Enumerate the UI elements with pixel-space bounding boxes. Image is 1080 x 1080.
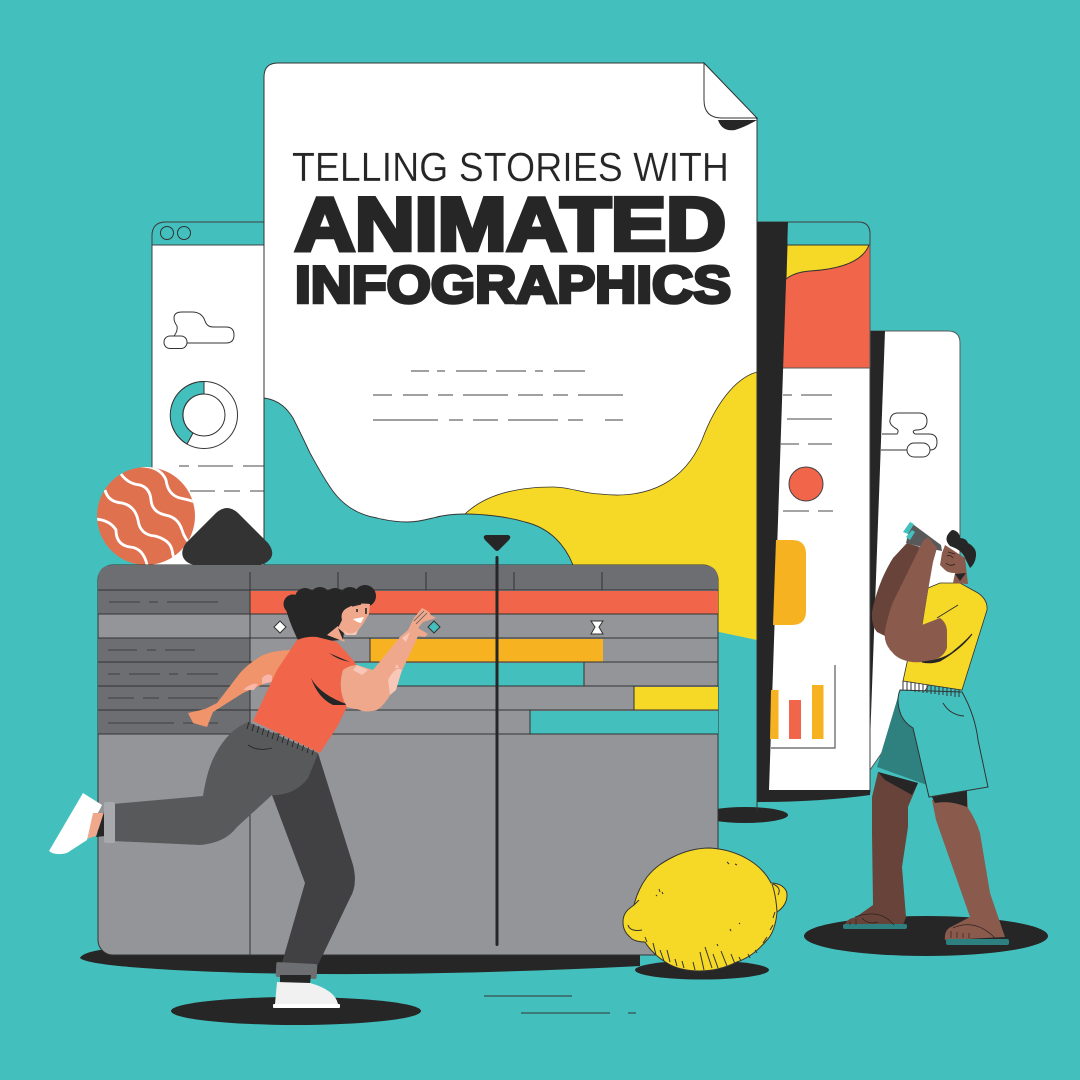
keyframe markers (274, 621, 603, 634)
panel: animation timeline (98, 565, 718, 955)
shirt (253, 637, 358, 753)
icon: orange patterned ball (97, 467, 195, 564)
front leg (932, 793, 1005, 940)
title: INFOGRAPHICS (295, 256, 731, 314)
panel: right back window (860, 331, 960, 770)
front arm (885, 537, 947, 662)
back shoe (49, 793, 105, 854)
front cuff (276, 962, 317, 979)
timeline header (98, 565, 718, 590)
sleeve line (937, 605, 958, 618)
icon: lemon (623, 848, 787, 971)
track labels column (98, 590, 250, 734)
title: ANIMATED (295, 182, 726, 266)
back leg (845, 772, 918, 925)
neck shadow (955, 573, 966, 581)
neck and head (940, 545, 968, 584)
icon: dark rounded triangle (182, 508, 272, 565)
shirt fold (311, 653, 350, 705)
shorts front (898, 690, 988, 797)
back arm (188, 650, 293, 727)
hair (946, 530, 976, 568)
toes and straps (850, 914, 995, 938)
front shoe (273, 975, 340, 1008)
neck (327, 626, 345, 642)
back cuff (104, 802, 115, 843)
shorts back (877, 690, 927, 785)
flip flops (843, 924, 1009, 945)
face features (946, 552, 955, 565)
playhead (484, 535, 510, 946)
timeline bars (250, 591, 718, 734)
ground dashes (484, 996, 636, 1013)
panel: left window (152, 222, 264, 565)
collar shadow (338, 628, 344, 640)
ground shadows (80, 807, 1048, 1025)
shirt (903, 583, 987, 690)
pocket and stripes (903, 681, 964, 716)
panel: middle window (757, 222, 870, 802)
waistband detail (247, 722, 314, 755)
title (292, 144, 731, 314)
front arm (341, 608, 436, 712)
character: running woman (49, 585, 436, 1008)
face (338, 604, 370, 635)
rear leg (113, 722, 318, 845)
binoculars (903, 522, 942, 551)
undershorts (878, 772, 967, 807)
back arm (872, 543, 920, 637)
hair (284, 585, 376, 644)
shirt fold (922, 634, 972, 663)
character: man with binoculars (843, 522, 1009, 945)
title: TELLING STORIES WITH (292, 144, 729, 190)
panel: main document page (264, 63, 757, 812)
front leg (272, 753, 355, 967)
facial features (343, 603, 370, 635)
